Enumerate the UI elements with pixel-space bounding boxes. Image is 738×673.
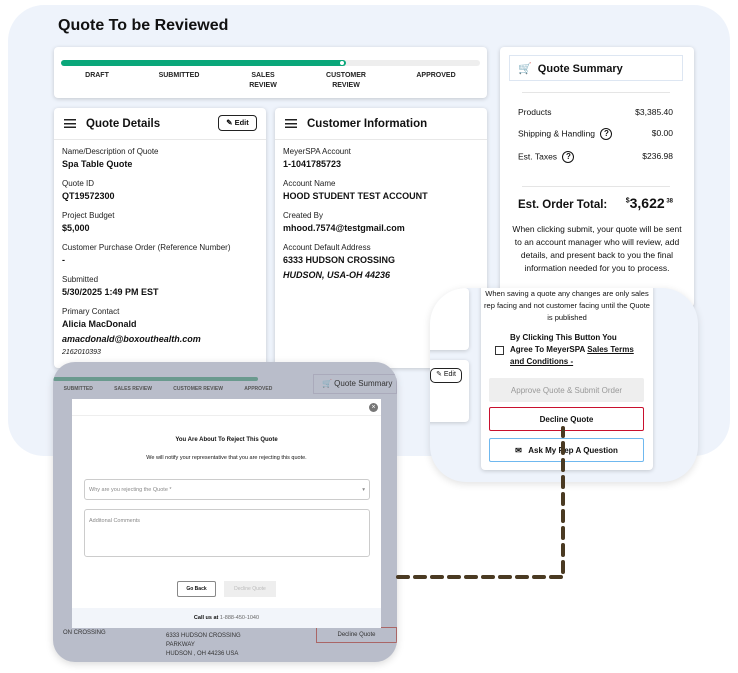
panel: reject modal screenshot: SUBMITTED — [64, 386, 93, 392]
panel: customer information — [275, 108, 487, 368]
panel: quote summary: ? — [566, 152, 571, 161]
progress tracker: CUSTOMER — [326, 72, 366, 79]
panel: customer information: HUDSON, USA-OH 44236 — [283, 270, 390, 280]
callout: action panel zoom — [430, 288, 698, 482]
panel: customer information: MeyerSPA Account — [283, 147, 351, 156]
panel: quote details: 2162010393 — [62, 349, 101, 356]
panel: quote summary: $236.98 — [642, 151, 673, 161]
panel: quote details: 5/30/2025 1:49 PM EST — [62, 287, 159, 297]
panel: actions: ✉ Ask My Rep A Question — [515, 446, 618, 454]
panel: reject modal screenshot: ON CROSSING — [63, 630, 106, 636]
panel: quote details: Alicia MacDonald — [62, 319, 137, 329]
icon: close — [369, 403, 378, 412]
panel: actions: By Clicking This Button You Agree To MeyerSPA Sales Terms and Conditions - — [510, 333, 634, 366]
panel: quote summary: $3,622 38 — [626, 195, 673, 211]
panel: reject modal screenshot: APPROVED — [244, 386, 272, 392]
panel: reject modal screenshot: CUSTOMER REVIEW — [173, 386, 223, 392]
panel: quote details: - — [62, 255, 65, 265]
callout: action panel zoom: ✎ Edit — [436, 371, 456, 378]
dialog: Go Back — [186, 586, 207, 592]
panel: customer information: 6333 HUDSON CROSSING — [283, 255, 395, 265]
icon: close: × — [371, 404, 376, 411]
panel: reject modal screenshot: PARKWAY — [166, 642, 195, 648]
panel: quote summary: ? — [604, 129, 609, 138]
panel: customer information: Account Name — [283, 179, 335, 188]
arrow: dashed connector — [396, 426, 565, 579]
edit button — [218, 115, 257, 131]
panel: reject modal screenshot: Decline Quote — [337, 632, 376, 638]
panel: quote summary: $3,385.40 — [635, 107, 673, 117]
panel: quote summary: $0.00 — [652, 128, 673, 138]
panel: reject modal screenshot: SALES REVIEW — [114, 386, 152, 392]
panel: customer information: mhood.7574@testgmail.com — [283, 223, 405, 233]
dialog — [72, 399, 381, 628]
panel: quote details: Submitted — [62, 275, 98, 284]
panel: quote details: Project Budget — [62, 211, 114, 220]
panel: quote summary: Est. Taxes — [518, 151, 557, 161]
panel: quote summary — [500, 47, 694, 307]
progress tracker: SUBMITTED — [159, 72, 199, 79]
panel: quote details: Primary Contact — [62, 307, 119, 316]
panel: reject modal screenshot: 🛒 Quote Summary — [322, 379, 392, 388]
dialog: We will notify your representative that you are rejecting this quote. — [146, 455, 307, 461]
panel: quote summary: Shipping & Handling — [518, 128, 595, 138]
panel: quote summary: Est. Order Total: — [518, 199, 607, 211]
panel: customer information: Created By — [283, 211, 323, 220]
panel: actions: Decline Quote — [540, 414, 593, 424]
dialog: Decline Quote — [234, 586, 266, 592]
dialog: You Are About To Reject This Quote — [175, 437, 278, 443]
panel: actions — [481, 284, 653, 470]
dialog: Additonal Comments — [89, 518, 140, 524]
panel: customer information: Customer Information — [307, 118, 427, 130]
panel: quote details: Name/Description of Quote — [62, 147, 158, 156]
panel: customer information: HOOD STUDENT TEST ACCOUNT — [283, 191, 428, 201]
progress tracker: DRAFT — [85, 72, 109, 79]
panel: quote details: Quote Details — [86, 118, 160, 130]
panel: quote details: Spa Table Quote — [62, 159, 132, 169]
edit button: ✎ Edit — [226, 118, 249, 127]
panel: reject modal screenshot: 6333 HUDSON CROSSING — [166, 633, 241, 639]
panel: quote details: QT19572300 — [62, 191, 115, 201]
panel: customer information: 1-1041785723 — [283, 159, 341, 169]
panel: reject modal screenshot — [53, 362, 397, 662]
dialog: Call us at 1-888-450-1040 — [194, 615, 259, 621]
progress tracker: SALES — [251, 72, 275, 79]
title: Quote To be Reviewed — [58, 17, 228, 34]
panel: quote summary: When clicking submit, your quote will be sent to an account manager who will review, add details, and present back to you the final information needed for you to process. — [512, 224, 682, 273]
panel: quote details: $5,000 — [62, 223, 90, 233]
panel: quote summary: 🛒 Quote Summary — [518, 62, 623, 74]
panel: quote summary: Products — [518, 107, 552, 117]
dialog: ▾ — [362, 487, 365, 493]
panel: quote details: Quote ID — [62, 179, 94, 188]
panel: actions: When saving a quote any changes are only sales rep facing and not customer facing until the Quote is published — [484, 289, 650, 322]
panel: reject modal screenshot: HUDSON , OH 44236 USA — [166, 651, 238, 657]
progress tracker: APPROVED — [416, 72, 456, 79]
background container — [8, 5, 730, 456]
panel: quote details: amacdonald@boxouthealth.com — [62, 334, 201, 344]
progress tracker: REVIEW — [249, 82, 277, 89]
dialog: Why are you rejecting the Quote * — [89, 487, 172, 493]
progress tracker: REVIEW — [332, 82, 360, 89]
panel: quote details — [54, 108, 266, 368]
panel: customer information: Account Default Address — [283, 243, 371, 252]
panel: actions: Approve Quote & Submit Order — [511, 386, 622, 394]
panel: quote details: Customer Purchase Order (Reference Number) — [62, 243, 231, 252]
progress tracker — [54, 47, 487, 98]
